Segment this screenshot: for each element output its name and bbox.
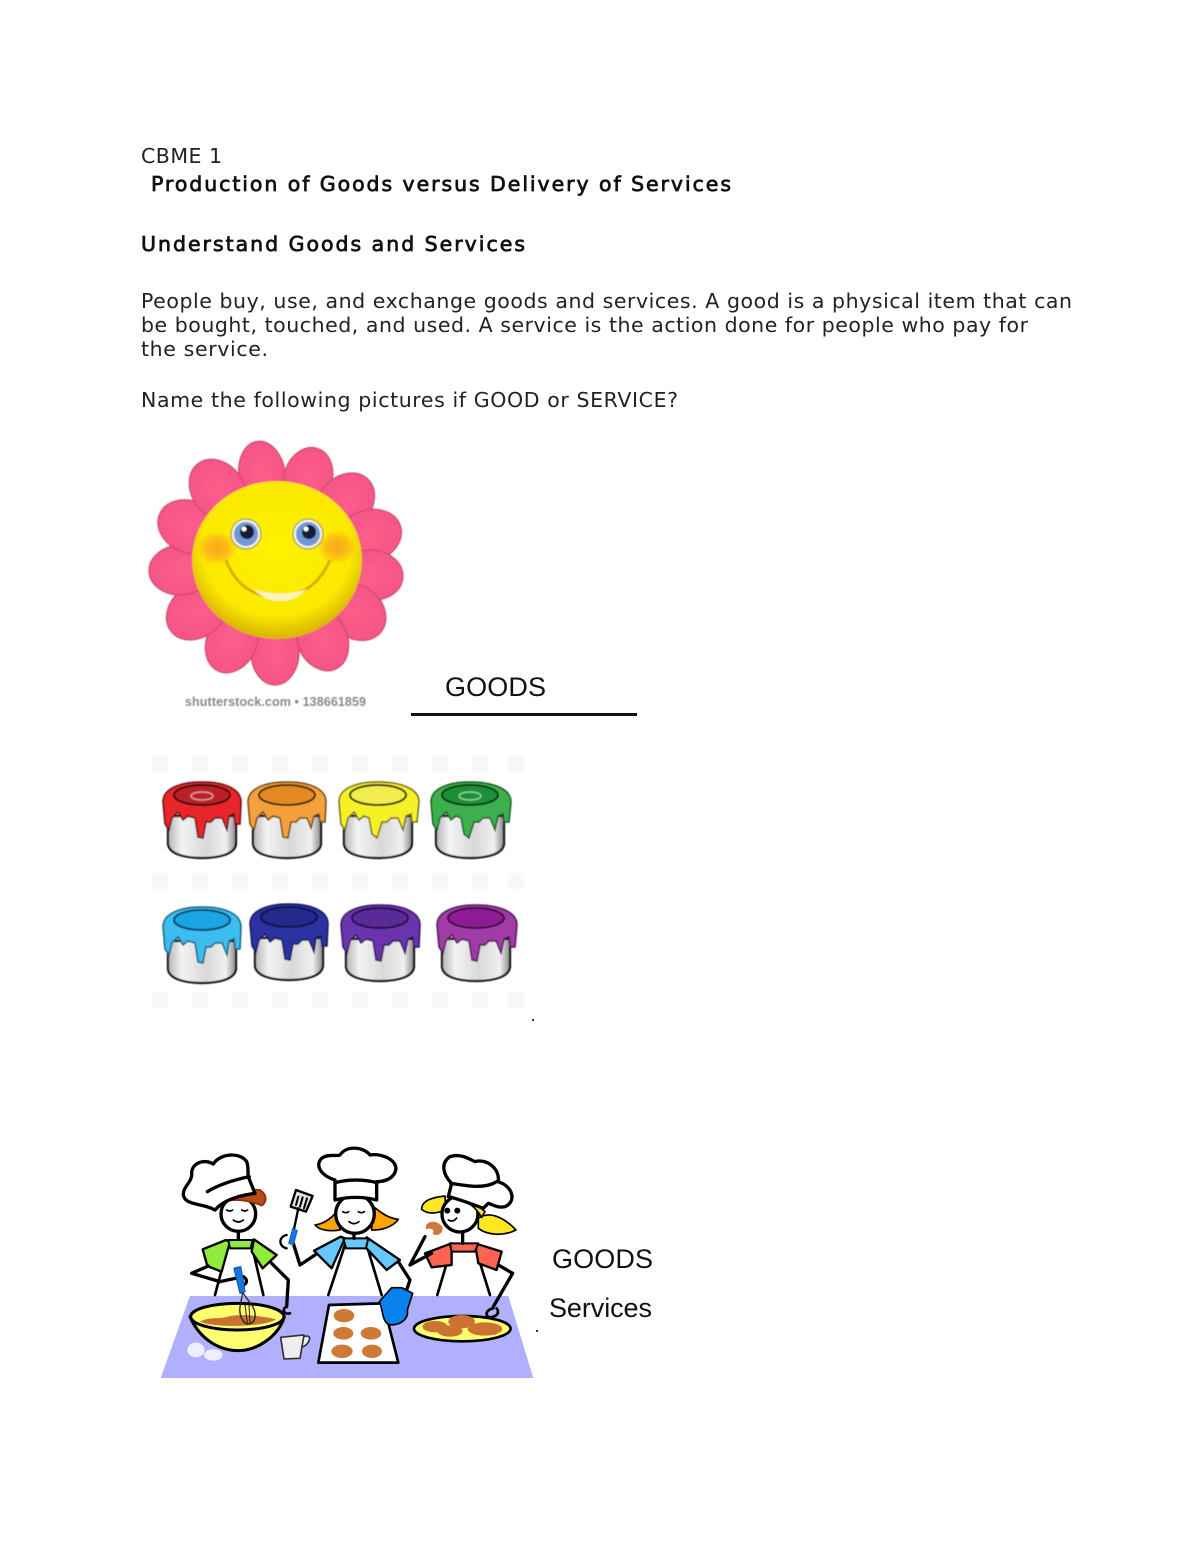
navy can [250,904,328,980]
baking tray [318,1303,398,1363]
intro paragraph [141,289,1072,361]
flower smile [226,560,330,597]
page text: header [141,144,731,256]
picture: smiling flower [148,438,408,709]
red can [163,782,241,858]
picture: three chefs baking [161,1148,533,1378]
chef 2 [293,1148,410,1295]
hand on plate [487,1308,498,1317]
plate of cookies [414,1315,511,1341]
table [161,1296,533,1378]
picture: paint cans [152,756,524,1008]
stray dot after paint cans [532,1019,534,1021]
chef 1 [183,1155,288,1307]
oven mitt [379,1288,413,1325]
violet can [341,905,420,981]
intro paragraph: be bought, touched, and used. A service is the action done for people who pay for [141,313,1029,337]
watermark: shutterstock.com • 138661859 [185,695,366,709]
faint watermark squares [152,756,524,1008]
green can [431,782,511,858]
cookie in hand [426,1222,443,1235]
purple can [437,905,517,981]
flower petals [148,438,408,685]
instruction: Name the following pictures if GOOD or SERVICE? [141,388,678,412]
mixing bowl [190,1267,284,1351]
icon: spatula [280,1190,313,1248]
answer: GOODS with underline: GOODS [445,672,546,702]
flower face [192,481,362,639]
orange can [248,782,326,858]
answer: GOODS with underline [411,672,637,716]
flower eyes [231,519,323,549]
title: Production of Goods versus Delivery of Services [151,172,731,196]
section heading: Understand Goods and Services [141,232,525,256]
light blue can [163,907,241,983]
measuring cup [281,1335,310,1359]
stray dot after chefs [536,1330,538,1332]
yellow can [339,782,419,858]
intro paragraph: People buy, use, and exchange goods and services. A good is a physical item that can [141,289,1072,313]
course code: CBME 1 [141,144,222,168]
answer option: GOODS: GOODS [552,1244,653,1274]
answer option: Services: Services [549,1293,652,1323]
intro paragraph: the service. [141,337,268,361]
eggs [187,1343,223,1361]
chef 3 [410,1156,516,1307]
